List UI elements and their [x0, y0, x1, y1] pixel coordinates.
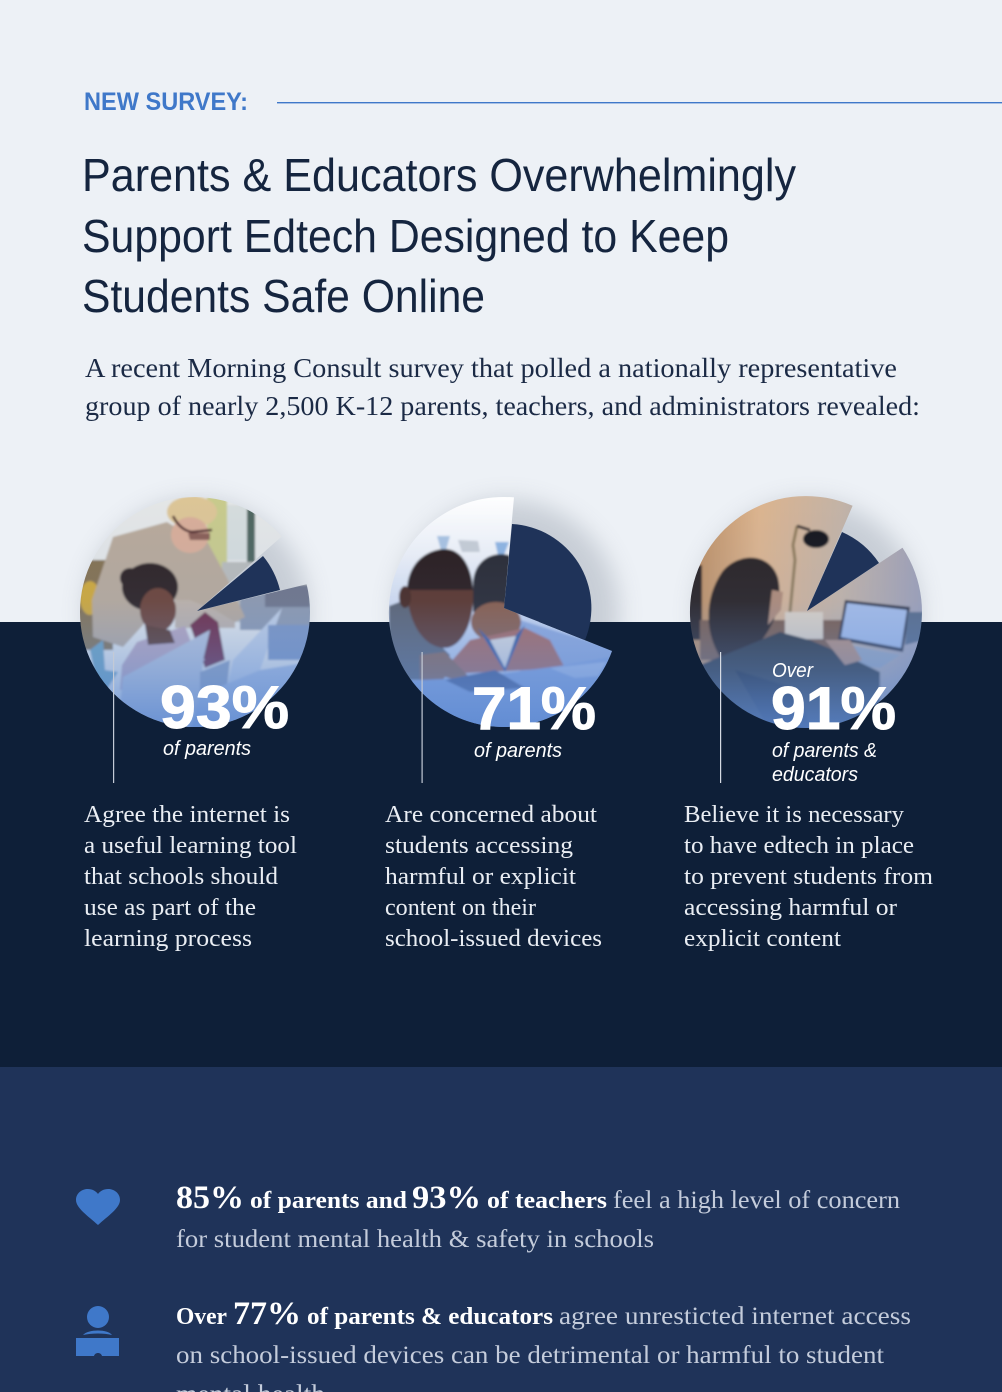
description	[84, 802, 297, 952]
description: accessing harmful or	[684, 895, 897, 921]
finding: unrestricted internet access: on school-issued devices can be detrimental or harmful to student	[176, 1342, 884, 1369]
description: use as part of the	[84, 895, 256, 921]
vertical rule	[720, 652, 721, 783]
finding: unrestricted internet access: agree unresticted internet access	[559, 1303, 911, 1330]
finding: unrestricted internet access: Over	[176, 1304, 227, 1330]
photo: teacher and student at laptops	[78, 495, 312, 730]
stat prefix: over: Over	[772, 660, 814, 682]
eyebrow: new survey: NEW SURVEY:	[84, 88, 248, 116]
stat: 71%: 71%	[472, 675, 596, 742]
finding: mental health concern: for student mental health & safety in schools	[176, 1226, 654, 1253]
background: light header area	[0, 0, 1002, 622]
stat label: of parents &	[772, 740, 877, 762]
vertical rule	[113, 652, 114, 783]
stat: 91%: 91%	[771, 675, 896, 742]
finding: unrestricted internet access: of parents & educators	[307, 1304, 553, 1330]
description: that schools should	[84, 864, 278, 890]
vertical rule	[422, 652, 423, 783]
stat label: of parents	[474, 740, 562, 762]
stat label: of parents	[163, 738, 251, 760]
background: dark stats band	[0, 622, 1002, 1067]
chart slice	[197, 556, 280, 611]
finding: mental health concern	[176, 1180, 901, 1253]
circle shadows	[85, 500, 920, 724]
title: Students Safe Online	[82, 270, 485, 322]
photo: two boys with a tablet	[387, 495, 620, 730]
description: a useful learning tool	[84, 833, 297, 859]
finding: mental health concern: 85%	[176, 1180, 244, 1216]
description	[684, 802, 933, 952]
description: content on their	[385, 895, 536, 921]
title: Parents & Educators Overwhelmingly	[82, 149, 796, 201]
chart slice	[807, 532, 879, 611]
description: Believe it is necessary	[684, 802, 904, 828]
description: school-issued devices	[385, 926, 602, 952]
title: Support Edtech Designed to Keep	[82, 210, 729, 262]
background: navy findings band	[0, 1067, 1002, 1392]
finding: unrestricted internet access	[176, 1296, 911, 1392]
description: to prevent students from	[684, 864, 933, 890]
finding: mental health concern: 93%	[412, 1180, 481, 1216]
description: students accessing	[385, 833, 573, 859]
description: explicit content	[684, 926, 841, 952]
stat label	[772, 740, 877, 786]
stat: 93%: 93%	[160, 674, 289, 741]
finding: mental health concern: of parents and	[250, 1188, 408, 1214]
intro paragraph: group of nearly 2,500 K-12 parents, teachers, and administrators revealed:	[85, 391, 920, 421]
intro paragraph	[85, 353, 920, 421]
icon: student at desk	[76, 1306, 119, 1356]
description: learning process	[84, 926, 252, 952]
intro paragraph: A recent Morning Consult survey that polled a nationally representative	[85, 353, 897, 383]
panel: 71% of parents	[385, 495, 620, 952]
description: Are concerned about	[385, 802, 597, 828]
finding: mental health concern: of teachers	[487, 1188, 607, 1214]
finding: unrestricted internet access: 77%	[233, 1296, 301, 1332]
title	[82, 149, 796, 322]
panel: over 91% of parents and educators	[684, 495, 933, 952]
photo: woman working on a laptop	[688, 495, 924, 740]
panel: 93% of parents	[78, 495, 312, 952]
stat label: educators	[772, 764, 858, 786]
description: harmful or explicit	[385, 864, 576, 890]
chart slice	[504, 524, 591, 640]
description: to have edtech in place	[684, 833, 914, 859]
finding: mental health concern: feel a high level of concern	[613, 1187, 901, 1214]
description: Agree the internet is	[84, 802, 290, 828]
icon: heart	[76, 1189, 120, 1225]
description	[385, 802, 602, 952]
